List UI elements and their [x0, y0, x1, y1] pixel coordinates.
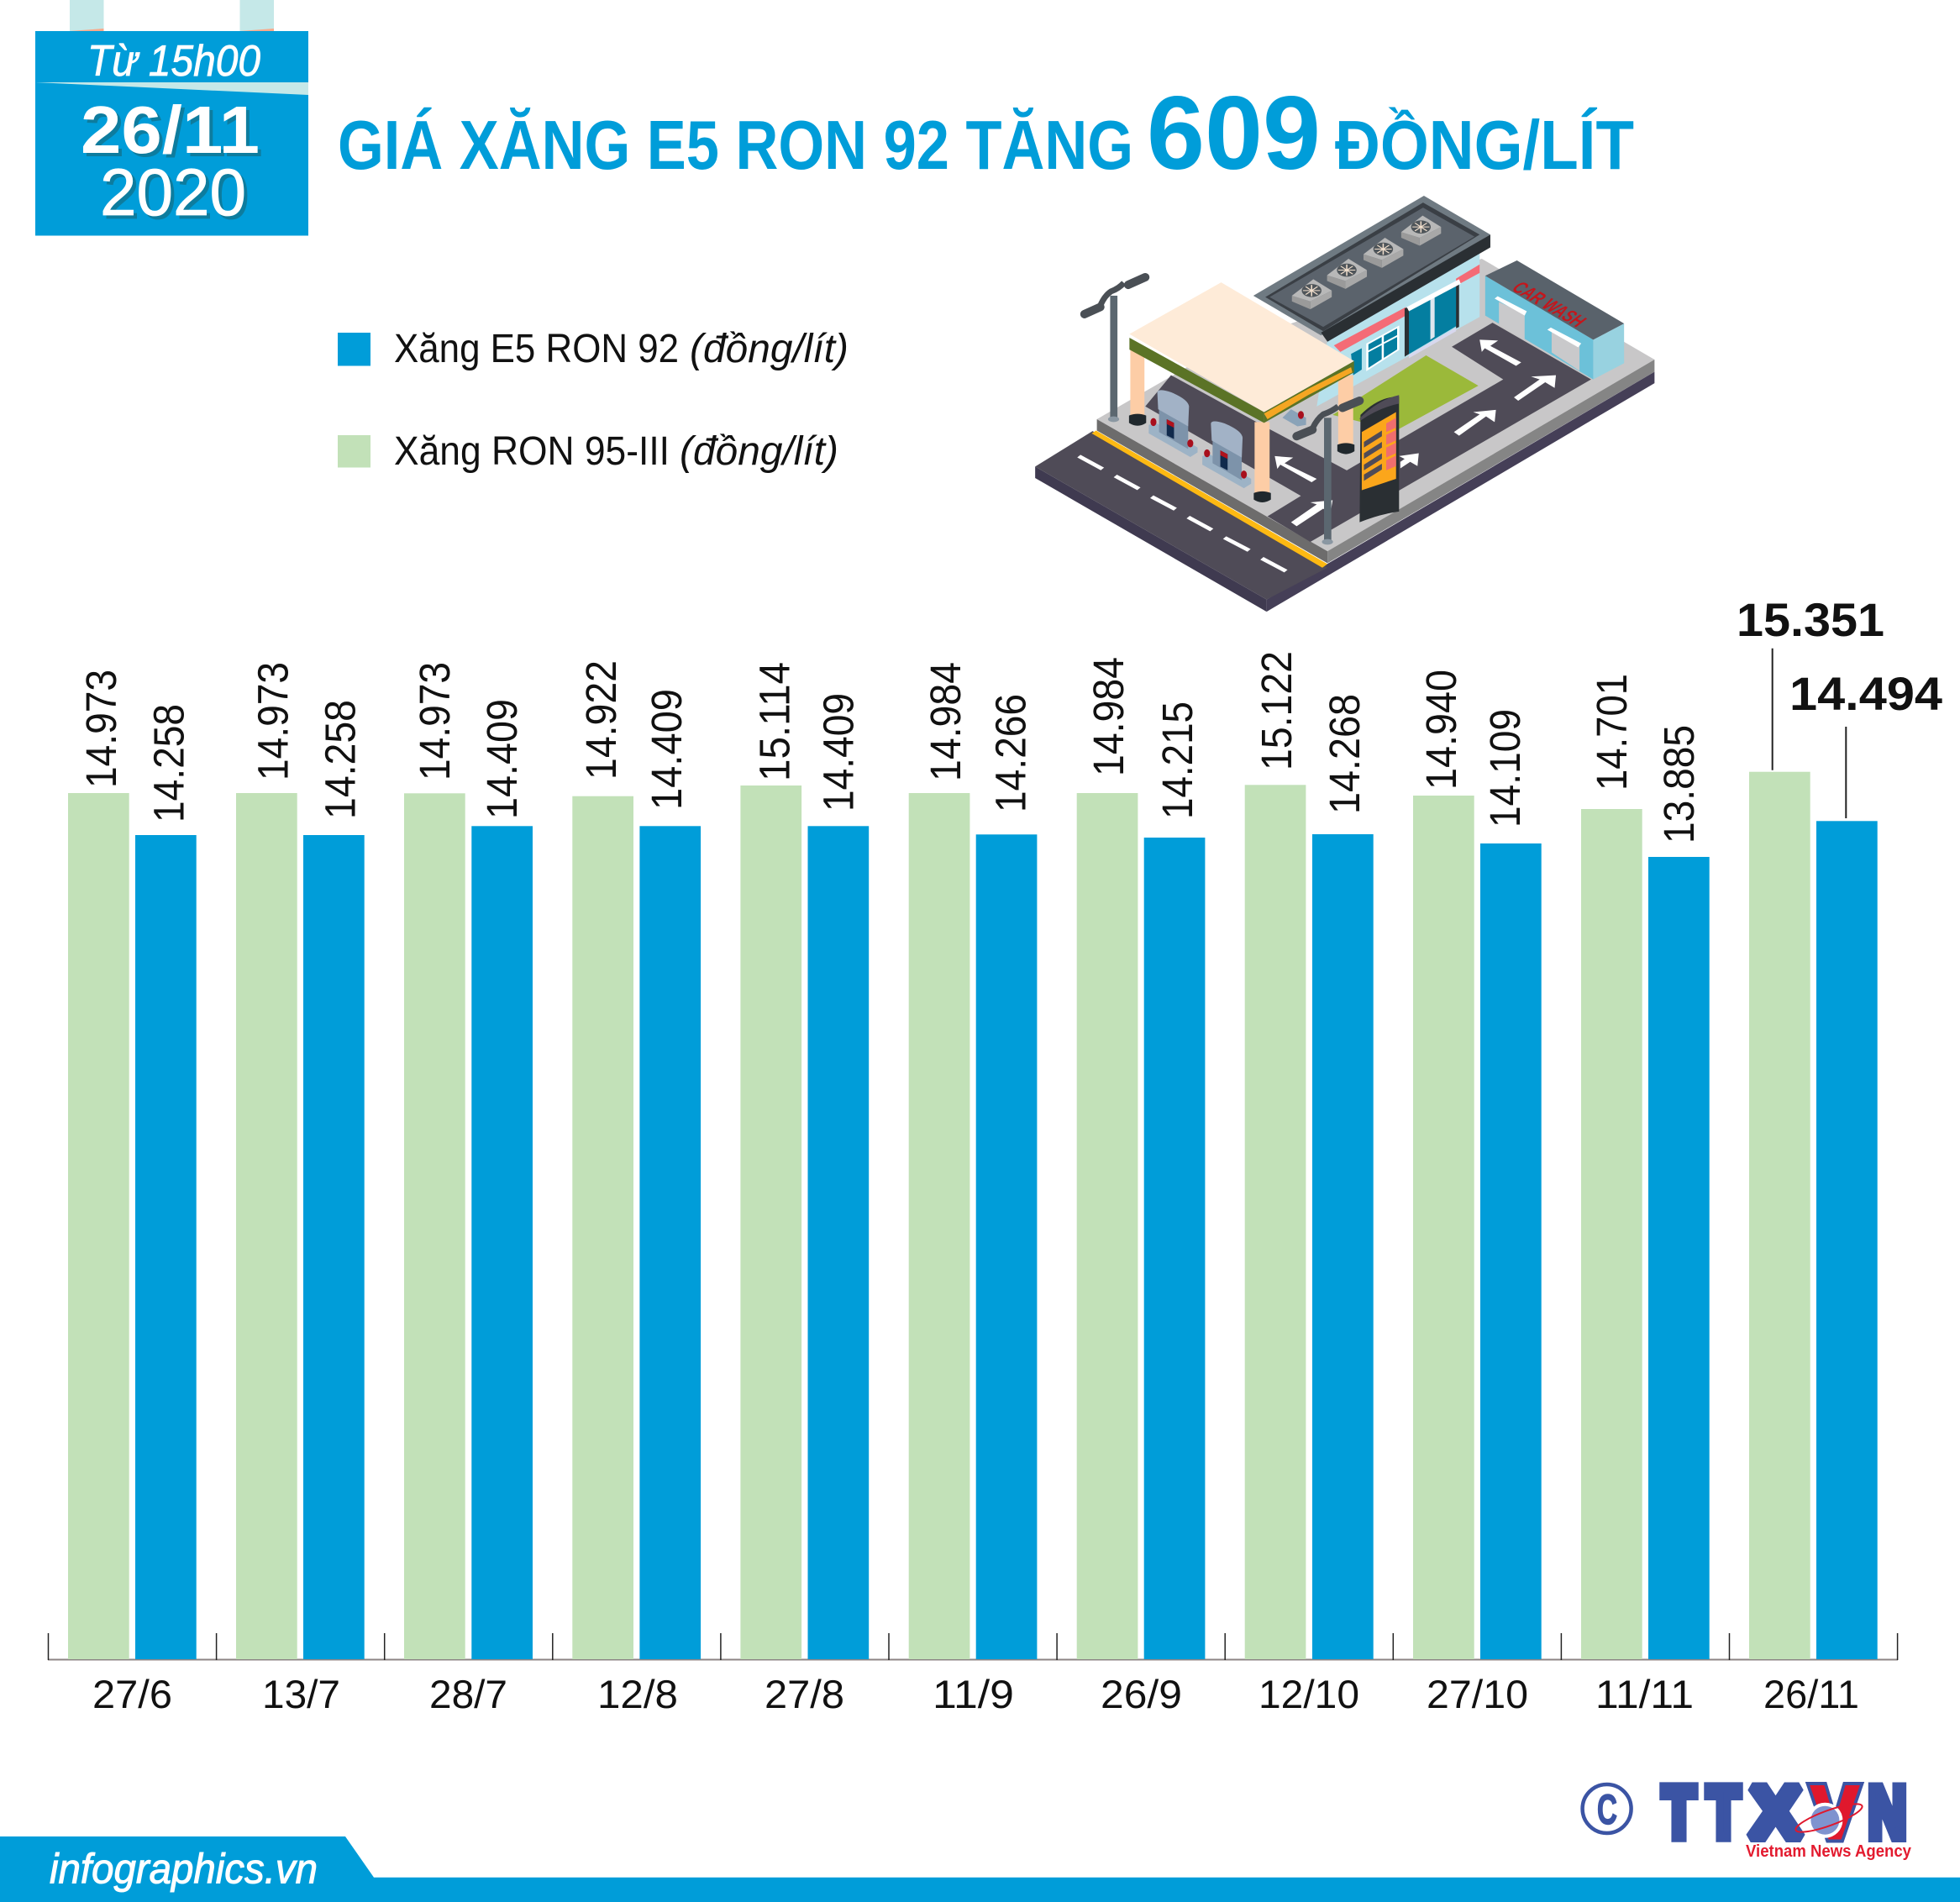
rotated value labels: 14.268 — [1321, 694, 1369, 814]
title — [338, 76, 1634, 192]
copyright and TTXVN logo: T — [1663, 1773, 1695, 1853]
rotated value labels: 14.701 — [1588, 674, 1636, 791]
rotated value labels: 14.973 — [77, 670, 125, 788]
copyright and TTXVN logo — [1583, 1773, 1912, 1861]
legend: Xăng E5 RON 92 — [394, 327, 679, 371]
illustration: isometric gas station: CAR WASH — [1506, 279, 1591, 331]
copyright and TTXVN logo: X — [1750, 1773, 1801, 1853]
rotated value labels: 14.109 — [1481, 709, 1529, 828]
highlighted values 26/11: 15.351 — [1737, 593, 1884, 646]
illustration: isometric gas station — [1035, 196, 1654, 612]
footer band — [0, 1836, 1960, 1902]
legend: (đồng/lít) — [690, 327, 849, 371]
rotated value labels: 14.215 — [1153, 701, 1201, 819]
date axis labels: 12/8 — [597, 1672, 678, 1716]
rotated value labels: 14.922 — [577, 660, 625, 780]
rotated value labels: 14.409 — [643, 689, 691, 810]
badge year: 2020 — [100, 155, 246, 229]
rotated value labels: 14.409 — [815, 693, 863, 812]
footer website: infographics.vn — [50, 1846, 318, 1893]
highlighted values 26/11: 14.494 — [1789, 667, 1942, 720]
copyright and TTXVN logo: N — [1868, 1773, 1906, 1853]
date axis labels: 11/11 — [1595, 1672, 1694, 1716]
copyright and TTXVN logo: V — [1812, 1773, 1858, 1853]
copyright and TTXVN logo: Vietnam News Agency — [1746, 1842, 1912, 1861]
rotated value labels: 14.409 — [478, 699, 526, 819]
copyright and TTXVN logo: T — [1707, 1773, 1740, 1853]
date axis labels — [92, 1672, 1859, 1716]
title: GIÁ XĂNG E5 RON 92 TĂNG — [338, 106, 1133, 184]
rotated value labels — [77, 651, 1703, 843]
rotated value labels: 14.258 — [145, 704, 192, 822]
legend: Xăng RON 95-III — [394, 429, 670, 474]
date axis labels: 26/11 — [1763, 1672, 1859, 1716]
legend: (đồng/lít) — [680, 429, 838, 474]
date axis labels: 27/10 — [1427, 1672, 1528, 1716]
rotated value labels: 14.984 — [1085, 657, 1132, 776]
rotated value labels: 14.940 — [1417, 670, 1465, 790]
rotated value labels: 15.114 — [750, 662, 798, 781]
rotated value labels: 14.266 — [987, 694, 1035, 812]
rotated value labels: 14.984 — [922, 662, 969, 781]
date axis labels: 27/8 — [765, 1672, 844, 1716]
date axis labels: 12/10 — [1258, 1672, 1359, 1716]
highlighted values 26/11 — [1737, 593, 1942, 818]
bars: Xăng E5 RON 92 — [135, 821, 1878, 1659]
date axis labels: 11/9 — [933, 1672, 1014, 1716]
rotated value labels: 14.258 — [317, 700, 365, 819]
rotated value labels: 15.122 — [1253, 651, 1301, 770]
rotated value labels: 13.885 — [1655, 725, 1703, 843]
date axis labels: 26/9 — [1101, 1672, 1182, 1716]
rotated value labels: 14.973 — [411, 662, 459, 780]
copyright and TTXVN logo: V — [1812, 1773, 1858, 1853]
date badge — [35, 0, 308, 235]
rotated value labels: 14.973 — [250, 662, 297, 780]
chart axis — [48, 1633, 1898, 1660]
bars: Xăng RON 95-III — [68, 772, 1810, 1659]
badge time: Từ 15h00 — [87, 37, 260, 86]
title: 609 — [1147, 76, 1321, 192]
badge date: 26/11 — [81, 92, 260, 167]
legend — [338, 327, 849, 474]
copyright and TTXVN logo: C — [1597, 1786, 1617, 1833]
date axis labels: 27/6 — [92, 1672, 172, 1716]
date axis labels: 28/7 — [429, 1672, 507, 1716]
title: ĐỒNG/LÍT — [1335, 106, 1634, 184]
date axis labels: 13/7 — [262, 1672, 340, 1716]
